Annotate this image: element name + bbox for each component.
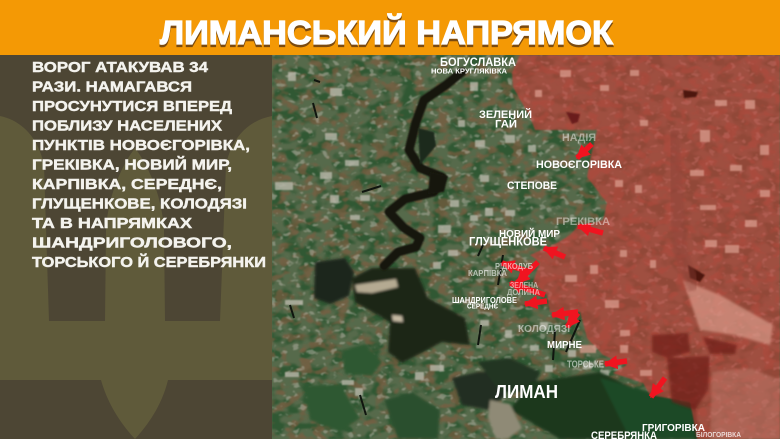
title: ЛИМАНСЬКИЙ НАПРЯМОК <box>160 16 614 54</box>
farm fields <box>275 72 609 396</box>
text block: ШАНДРИГОЛОВОГО, <box>32 234 232 252</box>
place labels: КАРПІВКА <box>468 269 507 278</box>
header bar <box>0 0 780 55</box>
left panel <box>0 55 272 439</box>
place labels: НОВА КРУГЛЯКІВКА <box>431 68 507 76</box>
place labels: ГЛУЩЕНКОВЕ <box>469 236 547 248</box>
place labels: ДОЛИНА <box>507 288 540 297</box>
text block: ВОРОГ АТАКУВАВ 34 <box>32 59 209 76</box>
text block: ПОБЛИЗУ НАСЕЛЕНИХ <box>32 118 222 134</box>
river <box>384 72 462 266</box>
text block: КАРПІВКА, СЕРЕДНЄ, <box>32 176 222 193</box>
text block: ПУНКТІВ НОВОЄГОРІВКА, <box>32 137 250 154</box>
place labels: БОГУСЛАВКА <box>440 55 516 69</box>
place labels: ЗЕЛЕНА <box>510 281 538 290</box>
place labels <box>431 55 741 439</box>
place labels: СТЕПОВЕ <box>507 180 557 192</box>
place labels: ШАНДРИГОЛОВЕ <box>452 295 517 305</box>
text block: РАЗИ. НАМАГАВСЯ <box>32 78 192 96</box>
text block: ТОРСЬКОГО Й СЕРЕБРЯНКИ <box>32 253 266 271</box>
occupied zone <box>512 55 780 439</box>
text block: ПРОСУНУТИСЯ ВПЕРЕД <box>32 98 232 115</box>
place labels: ГРЕКІВКА <box>556 216 610 228</box>
place labels: ГАЙ <box>495 118 517 130</box>
text block: ГЛУЩЕНКОВЕ, КОЛОДЯЗІ <box>32 196 247 212</box>
place labels: РІДКОДУБ <box>495 262 533 271</box>
place labels: ГРИГОРІВКА <box>642 422 705 434</box>
place labels: КОЛОДЯЗІ <box>518 323 570 335</box>
forests and sand <box>304 258 698 439</box>
trident emblem <box>0 116 272 439</box>
place labels: МИРНЕ <box>547 340 582 351</box>
place labels: НОВОЄГОРІВКА <box>536 159 622 171</box>
text block: ТА В НАПРЯМКАХ <box>32 215 192 232</box>
attack arrows <box>502 144 665 397</box>
place labels: ЗЕЛЕНИЙ <box>479 108 532 121</box>
title: ЛИМАНСЬКИЙ НАПРЯМОК <box>160 13 614 51</box>
place labels: НОВИЙ МИР <box>499 227 560 240</box>
place labels: ТОРСЬКЕ <box>567 360 604 370</box>
map <box>272 55 780 439</box>
place labels: СЕРЕДНЄ <box>467 304 498 310</box>
place labels: НАДІЯ <box>562 132 596 144</box>
text block <box>32 59 266 271</box>
text block: ГРЕКІВКА, НОВИЙ МИР, <box>32 156 232 174</box>
place labels: ЛИМАН <box>495 382 558 402</box>
place labels: БІЛОГОРІВКА <box>696 432 741 439</box>
